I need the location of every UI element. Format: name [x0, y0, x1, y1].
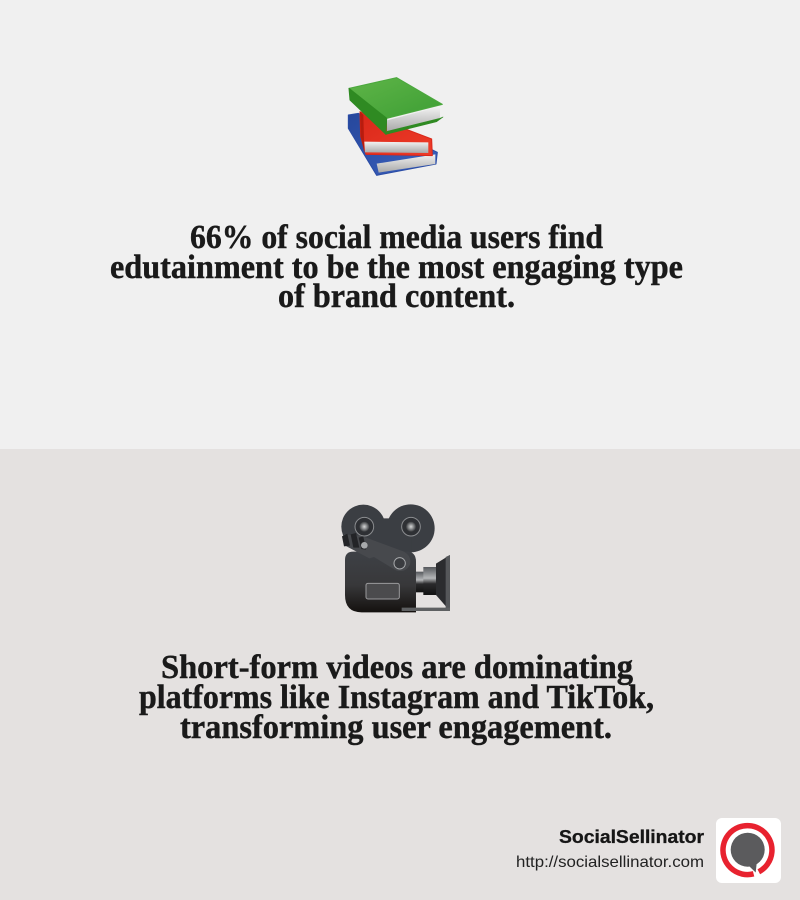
heading: edutainment statistic: edutainment to be the most engaging type	[110, 249, 683, 286]
icon: SocialSellinator logo	[716, 818, 781, 883]
text: brand name: SocialSellinator	[559, 826, 704, 847]
heading: short-form video statement: Short-form videos are dominating	[161, 649, 633, 686]
panel: top background	[0, 0, 800, 449]
heading: short-form video statement	[139, 649, 654, 746]
heading: edutainment statistic: 66% of social media users find	[190, 219, 603, 256]
heading: short-form video statement: transforming user engagement.	[180, 709, 612, 746]
icon: stack of books	[348, 78, 443, 175]
icon: movie camera	[341, 504, 450, 612]
heading: edutainment statistic	[110, 219, 683, 315]
panel: bottom background	[0, 449, 800, 900]
heading: short-form video statement: platforms like Instagram and TikTok,	[139, 679, 654, 716]
heading: edutainment statistic: of brand content.	[278, 278, 515, 315]
text: website url: http://socialsellinator.com	[516, 854, 704, 871]
